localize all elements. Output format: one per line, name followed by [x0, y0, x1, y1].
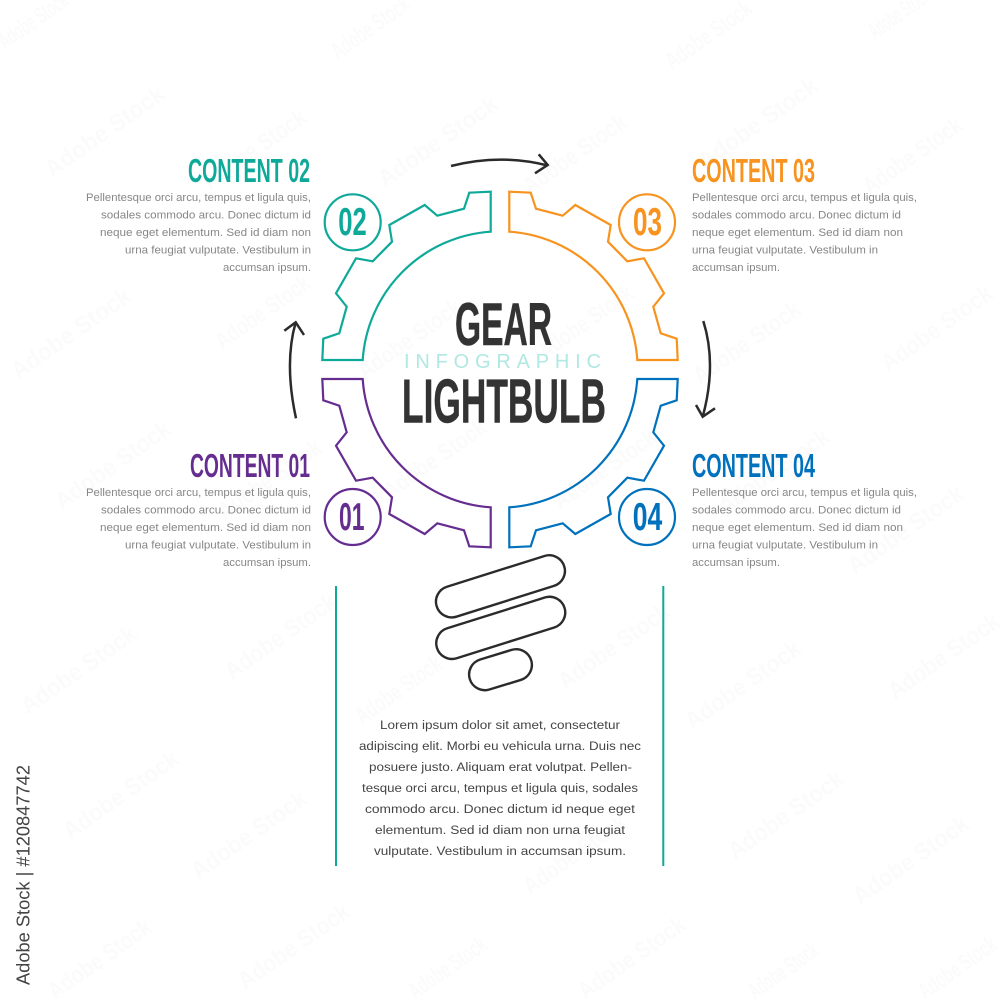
title: lightbulb: LIGHTBULB: [402, 368, 606, 436]
watermark pattern: Adobe Stock: [858, 112, 968, 200]
arrow: right, 03 to 04: [696, 321, 715, 417]
stock credit text: Adobe Stock | #120847742: [12, 765, 33, 985]
icon: lightbulb screw base: [432, 551, 569, 694]
text block: content 01: accumsan ipsum.: [223, 557, 311, 569]
text block: content 01: urna feugiat vulputate. Vestibulum in: [125, 540, 311, 552]
gear segment 04: blue: [509, 379, 678, 547]
text block: bulb body: tesque orci arcu, tempus et ligula quis, sodales: [362, 781, 638, 795]
text block: content 03: neque eget elementum. Sed id diam non: [692, 227, 903, 239]
number badge 01: 01: [339, 496, 364, 539]
title: gear: GEAR: [455, 291, 552, 358]
text block: content 03: sodales commodo arcu. Donec dictum id: [692, 210, 901, 222]
text block: content 02: [86, 192, 311, 274]
watermark pattern: Adobe Stock: [50, 415, 177, 515]
text block: content 04: neque eget elementum. Sed id diam non: [692, 522, 903, 534]
watermark pattern: Adobe Stock: [353, 294, 467, 385]
heading: content 04: CONTENT 04: [692, 447, 815, 484]
heading: content 02: CONTENT 02: [188, 152, 310, 189]
watermark pattern: Adobe Stock: [688, 296, 806, 390]
gear segment 02: teal: [322, 192, 491, 360]
number badge 03: [619, 194, 675, 250]
text block: content 04: Pellentesque orci arcu, tempus et ligula quis,: [692, 487, 917, 499]
text block: content 02: sodales commodo arcu. Donec dictum id: [101, 210, 311, 222]
arrow: left, 01 to 02: [284, 322, 304, 418]
number badge 03: 03: [633, 201, 662, 244]
text block: bulb body: [359, 718, 641, 858]
text block: content 04: sodales commodo arcu. Donec dictum id: [692, 504, 901, 516]
number badge 04: [619, 489, 675, 545]
watermark pattern: Adobe Stock: [518, 109, 632, 200]
text block: bulb body: elementum. Sed id diam non urna feugiat: [375, 823, 626, 837]
text block: content 01: Pellentesque orci arcu, tempus et ligula quis,: [86, 487, 311, 499]
subtitle: infographic: INFOGRAPHIC: [404, 351, 601, 373]
number badge 02: [325, 194, 381, 250]
watermark pattern: Adobe Stock: [210, 269, 316, 355]
text block: content 04: [692, 487, 917, 569]
text block: content 03: [692, 192, 917, 274]
arrow: top, 02 to 03: [451, 154, 548, 173]
text block: content 03: accumsan ipsum.: [692, 262, 780, 274]
text block: content 01: neque eget elementum. Sed id diam non: [100, 522, 311, 534]
watermark pattern: Adobe Stock: [553, 598, 675, 695]
text block: bulb body: adipiscing elit. Morbi eu vehicula urna. Duis nec: [359, 739, 641, 753]
watermark pattern: Adobe Stock: [848, 810, 975, 910]
watermark pattern: Adobe Stock: [220, 588, 342, 685]
watermark pattern: Adobe Stock: [213, 434, 327, 525]
watermark pattern: Adobe Stock: [186, 785, 313, 885]
number badge 02: 02: [338, 201, 367, 244]
heading: content 03: CONTENT 03: [692, 152, 815, 189]
watermark pattern: Adobe Stock: [680, 635, 807, 735]
watermark pattern: Adobe Stock: [548, 424, 662, 515]
text block: bulb body: Lorem ipsum dolor sit amet, consectetur: [380, 718, 620, 732]
watermark pattern: Adobe Stock: [518, 809, 632, 900]
gear segment 01: purple: [322, 379, 491, 547]
watermark pattern: Adobe Stock: [713, 423, 835, 520]
watermark pattern: Adobe Stock: [40, 80, 171, 183]
number badge 01: [325, 489, 381, 545]
text block: bulb body: commodo arcu. Donec dictum id neque eget: [365, 802, 636, 816]
bulb right side line: [662, 586, 664, 866]
text block: bulb body: vulputate. Vestibulum in accumsan ipsum.: [374, 844, 626, 858]
watermark pattern: Adobe Stock: [198, 104, 312, 195]
watermark pattern: Adobe Stock: [843, 480, 970, 580]
text block: content 02: Pellentesque orci arcu, tempus et ligula quis,: [86, 192, 311, 204]
watermark pattern: Adobe Stock: [16, 620, 143, 720]
watermark pattern: Adobe Stock: [58, 745, 185, 845]
number badge 04: 04: [633, 496, 663, 539]
text block: bulb body: posuere justo. Aliquam erat volutpat. Pellen-: [369, 760, 632, 774]
gear segment 03: orange: [509, 192, 678, 360]
watermark pattern: Adobe Stock: [533, 279, 639, 365]
text block: content 02: urna feugiat vulputate. Vestibulum in: [125, 244, 311, 256]
watermark pattern: Adobe Stock: [378, 414, 492, 505]
text block: content 03: Pellentesque orci arcu, tempus et ligula quis,: [692, 192, 917, 204]
bulb left side line: [335, 586, 337, 866]
text block: content 01: [86, 487, 311, 569]
text block: content 02: neque eget elementum. Sed id diam non: [100, 227, 311, 239]
watermark pattern: Adobe Stock: [723, 765, 850, 865]
text block: content 04: accumsan ipsum.: [692, 557, 780, 569]
watermark pattern: Adobe Stock: [6, 282, 137, 385]
text block: content 01: sodales commodo arcu. Donec dictum id: [101, 504, 311, 516]
watermark pattern: Adobe Stock: [233, 898, 355, 995]
watermark pattern: Adobe Stock: [373, 90, 504, 193]
text block: content 03: urna feugiat vulputate. Vestibulum in: [692, 244, 878, 256]
watermark pattern: Adobe Stock: [350, 650, 448, 730]
text block: content 02: accumsan ipsum.: [223, 262, 311, 274]
watermark pattern: Adobe Stock: [693, 72, 824, 175]
heading: content 01: CONTENT 01: [190, 447, 310, 484]
text block: content 04: urna feugiat vulputate. Vestibulum in: [692, 540, 878, 552]
